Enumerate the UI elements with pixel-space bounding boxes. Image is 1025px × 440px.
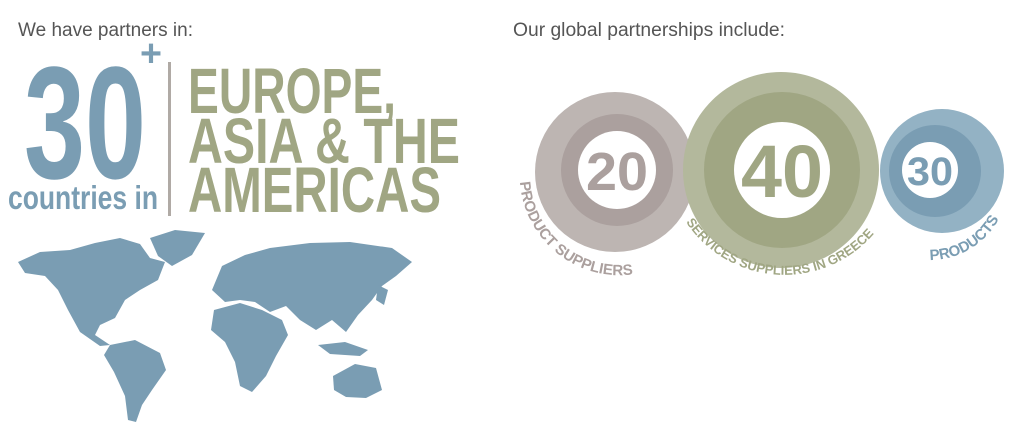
big number 30+: + [140, 33, 162, 75]
regions text: AMERICAS [188, 154, 441, 226]
circle: products: PRODUCTS [930, 215, 998, 260]
circle: product suppliers: 20 [586, 142, 648, 202]
circle: products [880, 109, 1004, 260]
regions text: EUROPE, [188, 55, 396, 127]
circle: product suppliers: PRODUCT SUPPLIERS [520, 182, 632, 276]
circle: services suppliers: SERVICES SUPPLIERS IN GREECE [687, 218, 874, 275]
circle: product suppliers [520, 92, 689, 276]
world map [18, 230, 412, 422]
big number 30+ [8, 33, 162, 216]
circle: services suppliers: 40 [741, 130, 823, 213]
regions text: ASIA & THE [188, 105, 460, 177]
big number 30+: 30 [24, 33, 146, 212]
regions text [188, 55, 460, 226]
heading: left: We have partners in: [18, 20, 193, 41]
big number 30+: countries in [8, 179, 158, 216]
heading: right: Our global partnerships include: [513, 20, 785, 41]
circle: services suppliers [683, 72, 879, 275]
circle: products: 30 [907, 150, 953, 194]
